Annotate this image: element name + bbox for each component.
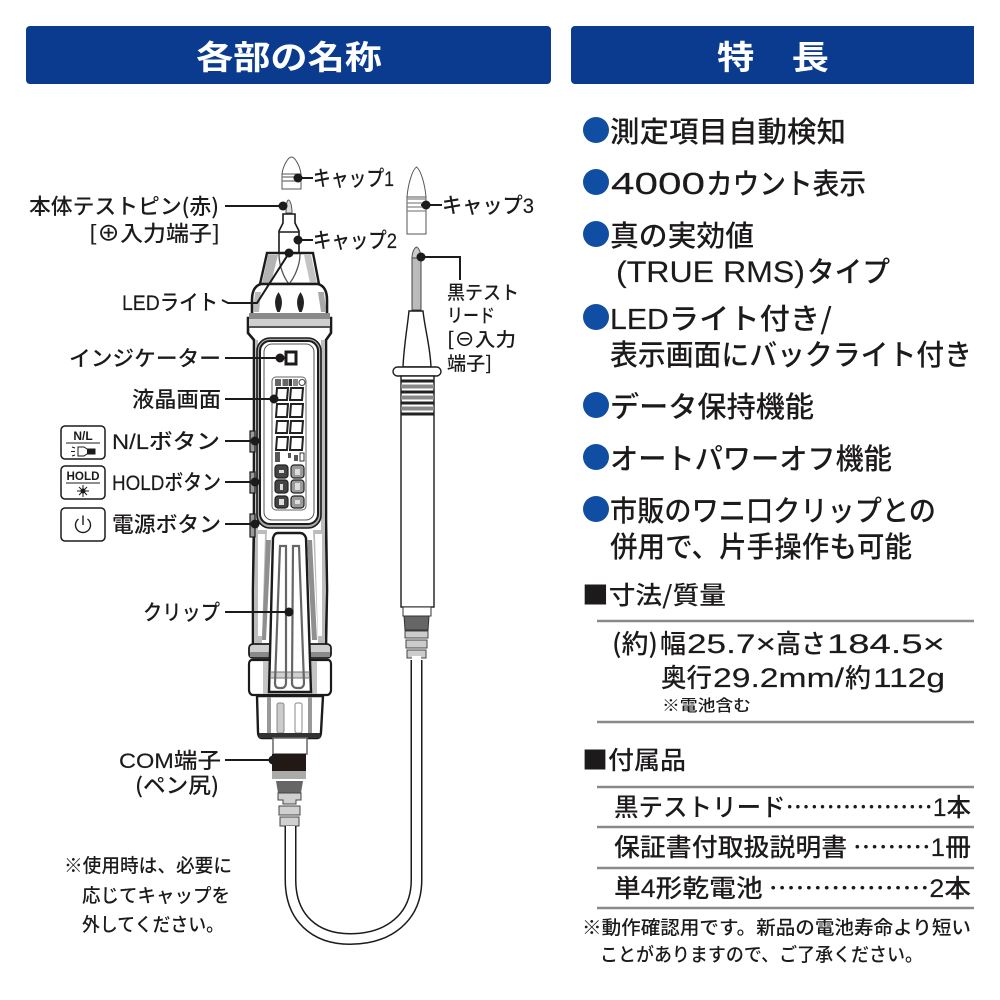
note: battery: ※動作確認用です。新品の電池寿命より短い — [582, 913, 971, 940]
cable — [290, 660, 416, 939]
upper body and shaft — [248, 284, 331, 645]
panel: features heading — [571, 26, 974, 84]
LCD digits — [276, 388, 303, 450]
note: battery: ことがありますので、ご了承ください。 — [600, 940, 923, 967]
note: caps: 外してください。 — [82, 910, 224, 937]
illustration: black lead — [290, 247, 441, 939]
labels: parts: LEDライト — [122, 286, 218, 317]
features list: 測定項目自動検知 — [610, 109, 846, 151]
cap 1 — [282, 157, 301, 189]
dimensions and weight — [582, 576, 974, 722]
dimensions and weight: 25.7× — [687, 629, 776, 659]
callout leaders — [222, 174, 460, 764]
dimensions and weight: 奥行 — [661, 658, 712, 695]
labels: parts: 本体テストピン(赤) — [29, 190, 219, 221]
lower collar — [249, 644, 331, 695]
LCD symbols row — [275, 379, 305, 386]
features list: データ保持機能 — [610, 384, 814, 426]
dimensions and weight: 幅 — [660, 624, 686, 661]
accessories: 黒テストリード………………1本 — [614, 788, 971, 824]
labels: parts: [⊕入力端子] — [89, 217, 220, 248]
cap 3 — [407, 167, 426, 234]
dimensions and weight: 29.2mm/ — [713, 663, 845, 693]
note: caps: 応じてキャップを — [82, 881, 230, 908]
features list: 4000 — [611, 166, 705, 201]
labels: parts: クリップ — [143, 596, 220, 627]
accessories: ■付属品 — [582, 741, 686, 777]
dimensions and weight: ■寸法/質量 — [582, 576, 726, 612]
features list: 市販のワニ口クリップとの — [610, 488, 936, 530]
dimensions and weight: 高さ — [776, 624, 826, 661]
labels: parts: (ペン尻) — [135, 769, 219, 800]
labels: parts: COM端子 — [119, 744, 221, 775]
label: black test lead — [447, 278, 519, 376]
features list: オートパワーオフ機能 — [610, 436, 892, 478]
features list: 表示画面にバックライト付き — [610, 332, 972, 374]
accessories — [582, 741, 974, 908]
label: black test lead: 端子] — [447, 349, 492, 376]
icon: HOLD button — [61, 466, 105, 499]
LCD function tiles — [275, 465, 304, 508]
LED lights — [276, 294, 303, 311]
lead handle — [393, 311, 441, 607]
base — [257, 696, 323, 738]
labels: parts: キャップ1 — [313, 162, 394, 193]
accessories: 単4形乾電池 ……………… 2本 — [614, 869, 971, 905]
labels: parts: キャップ3 — [442, 189, 534, 220]
features list: カウント表示 — [706, 161, 866, 203]
test pin — [279, 200, 299, 256]
lead strain relief — [403, 607, 431, 658]
note: battery — [582, 913, 971, 967]
labels: parts: キャップ2 — [313, 224, 397, 255]
icon: N/L button — [61, 426, 105, 459]
note: caps — [64, 851, 232, 937]
icon: HOLD button: HOLD — [66, 469, 100, 483]
display panel — [257, 338, 321, 528]
features list: タイプ — [807, 249, 890, 291]
lead tip — [412, 247, 421, 310]
LCD small marks — [275, 452, 304, 462]
note: caps: ※使用時は、必要に — [64, 851, 232, 878]
head cone — [260, 253, 319, 284]
features list — [583, 109, 972, 566]
label: black test lead: 黒テスト — [447, 278, 519, 305]
panel: parts names heading: 各部の名称 — [196, 31, 382, 79]
accessories: 保証書付取扱説明書 ……… 1冊 — [614, 828, 971, 864]
labels: parts: 液晶画面 — [132, 383, 221, 414]
LCD screen — [272, 377, 306, 510]
features list: LEDライト付き/ — [610, 296, 832, 338]
panel: parts names heading — [26, 26, 551, 84]
labels: parts: インジケーター — [69, 342, 221, 373]
dimensions and weight: ※電池含む — [662, 692, 751, 716]
features list: 真の実効値 — [610, 213, 754, 255]
label: black test lead: [⊖入力 — [447, 325, 516, 352]
dimensions and weight: 約 — [845, 658, 871, 695]
illustration: test probe body — [248, 157, 426, 826]
dimensions and weight: 184.5× — [827, 629, 945, 659]
icon: power button — [61, 508, 105, 541]
features list: (TRUE RMS) — [616, 256, 805, 289]
clip — [262, 533, 317, 692]
features list: 併用で、片手操作も可能 — [610, 524, 912, 566]
labels: parts: HOLDボタン — [112, 466, 221, 497]
dimensions and weight: (約) — [612, 624, 658, 661]
labels: parts: N/Lボタン — [112, 425, 220, 456]
indicator — [286, 352, 296, 364]
panel: features heading: 特 長 — [717, 31, 829, 79]
COM terminal — [272, 738, 307, 826]
labels: parts — [29, 162, 534, 800]
dimensions and weight: 112g — [873, 663, 945, 693]
labels: parts: 電源ボタン — [112, 508, 221, 539]
side buttons — [250, 431, 255, 537]
side grey strips — [255, 340, 267, 643]
label: black test lead: リード — [447, 301, 495, 328]
icon: N/L button: N/L — [73, 429, 93, 443]
